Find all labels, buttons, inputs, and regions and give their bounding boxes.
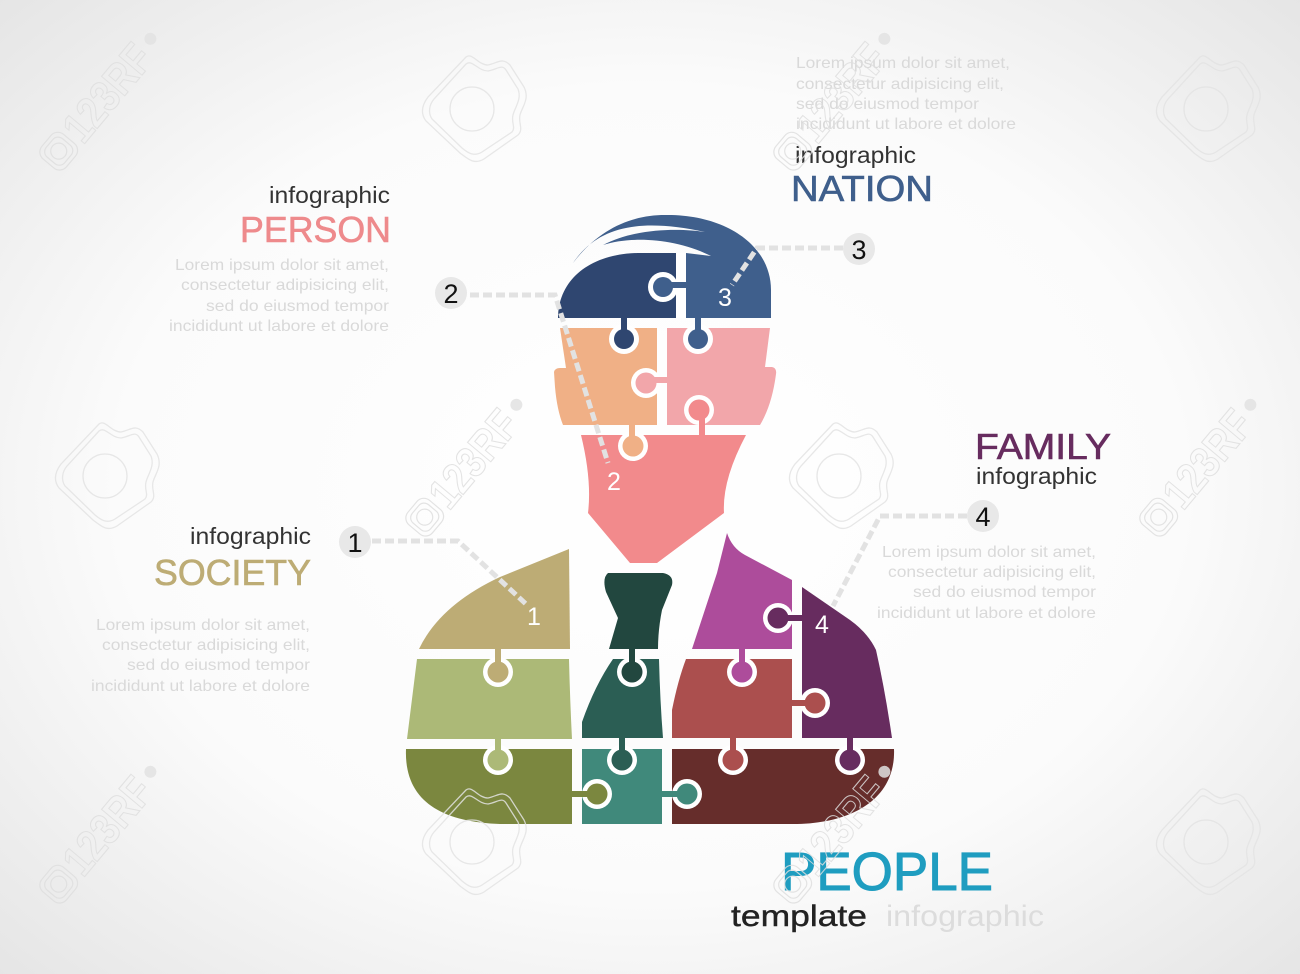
- title: people: PEOPLE: [781, 842, 993, 902]
- callout 3 leader: [732, 248, 843, 285]
- connector tabs: [488, 277, 860, 804]
- label: person: incididunt ut labore et dolore: [169, 318, 389, 335]
- puzzle piece: left chest: [407, 659, 572, 739]
- callout 4 leader: [833, 516, 967, 606]
- watermark stamps: 123RF: [53, 768, 163, 885]
- label: person: sed do eiusmod tempor: [206, 298, 390, 315]
- watermark stamps: 123RF: [419, 401, 529, 518]
- label: family: [877, 426, 1111, 622]
- label: nation: consectetur adipisicing elit,: [796, 76, 1004, 93]
- label: family: Lorem ipsum dolor sit amet,: [882, 544, 1096, 561]
- badge 2: [435, 277, 467, 309]
- callout 1 leader: [372, 541, 526, 604]
- puzzle connectors: white rings: [483, 253, 865, 809]
- puzzle piece: right lapel: [692, 533, 792, 649]
- label: person: Lorem ipsum dolor sit amet,: [175, 257, 389, 274]
- badge 4: 4: [975, 502, 991, 532]
- label: family: incididunt ut labore et dolore: [877, 605, 1096, 622]
- puzzle piece: right chest: [672, 659, 792, 738]
- label: nation: Lorem ipsum dolor sit amet,: [796, 55, 1010, 72]
- badge 4: [967, 500, 999, 532]
- label: nation: incididunt ut labore et dolore: [796, 116, 1016, 133]
- watermark stamps: 123RF: [53, 35, 163, 152]
- puzzle piece: left shoulder: [419, 549, 570, 649]
- label: society: sed do eiusmod tempor: [127, 657, 311, 674]
- label: society: SOCIETY: [154, 552, 311, 593]
- title: people: template: [731, 900, 867, 933]
- figure number 3: 3: [718, 284, 732, 312]
- figure number 4: 4: [815, 611, 829, 639]
- label: family: infographic: [976, 463, 1097, 489]
- label: person: PERSON: [240, 209, 391, 250]
- label: family: FAMILY: [975, 426, 1111, 467]
- puzzle piece: left face: [554, 328, 657, 425]
- badge 3: [843, 233, 875, 265]
- badge 3: 3: [851, 235, 867, 265]
- watermark stamps: 123RF: [787, 35, 897, 152]
- label: society: consectetur adipisicing elit,: [102, 637, 310, 654]
- label: society: Lorem ipsum dolor sit amet,: [96, 617, 310, 634]
- puzzle piece: right arm: [802, 587, 892, 738]
- label: family: sed do eiusmod tempor: [913, 584, 1097, 601]
- puzzle piece: hair left: [558, 253, 676, 318]
- figure number 2: 2: [607, 468, 621, 496]
- title: people: infographic: [886, 900, 1044, 933]
- title: people: [731, 842, 1044, 933]
- badge 2: 2: [443, 279, 459, 309]
- label: nation: sed do eiusmod tempor: [796, 96, 980, 113]
- person puzzle figure: [406, 215, 894, 824]
- label: society: incididunt ut labore et dolore: [91, 678, 310, 695]
- label: nation: [791, 55, 1016, 209]
- puzzle piece: chin: [581, 435, 746, 563]
- puzzle piece: right face: [667, 328, 776, 425]
- label: society: [91, 523, 311, 695]
- label: person: [169, 182, 391, 335]
- watermark stamps: 123RF: [787, 768, 897, 885]
- watermark stamps: 123RF: [1153, 401, 1263, 518]
- label: person: consectetur adipisicing elit,: [181, 277, 389, 294]
- puzzle piece: tie knot: [604, 573, 672, 649]
- puzzle piece: tie bottom: [582, 749, 662, 824]
- callout 2 leader: [470, 295, 608, 463]
- puzzle piece: right waist: [672, 749, 894, 824]
- figure number 1: 1: [527, 603, 541, 631]
- label: nation: NATION: [791, 168, 933, 209]
- label: society: infographic: [190, 523, 311, 549]
- label: family: consectetur adipisicing elit,: [888, 564, 1096, 581]
- puzzle piece: tie lower: [582, 659, 663, 738]
- badge 1: 1: [347, 528, 363, 558]
- puzzle piece: hair right: [573, 215, 771, 318]
- label: person: infographic: [269, 182, 390, 208]
- puzzle piece: left waist: [406, 749, 572, 824]
- badge 1: [339, 526, 371, 558]
- label: nation: infographic: [795, 142, 916, 168]
